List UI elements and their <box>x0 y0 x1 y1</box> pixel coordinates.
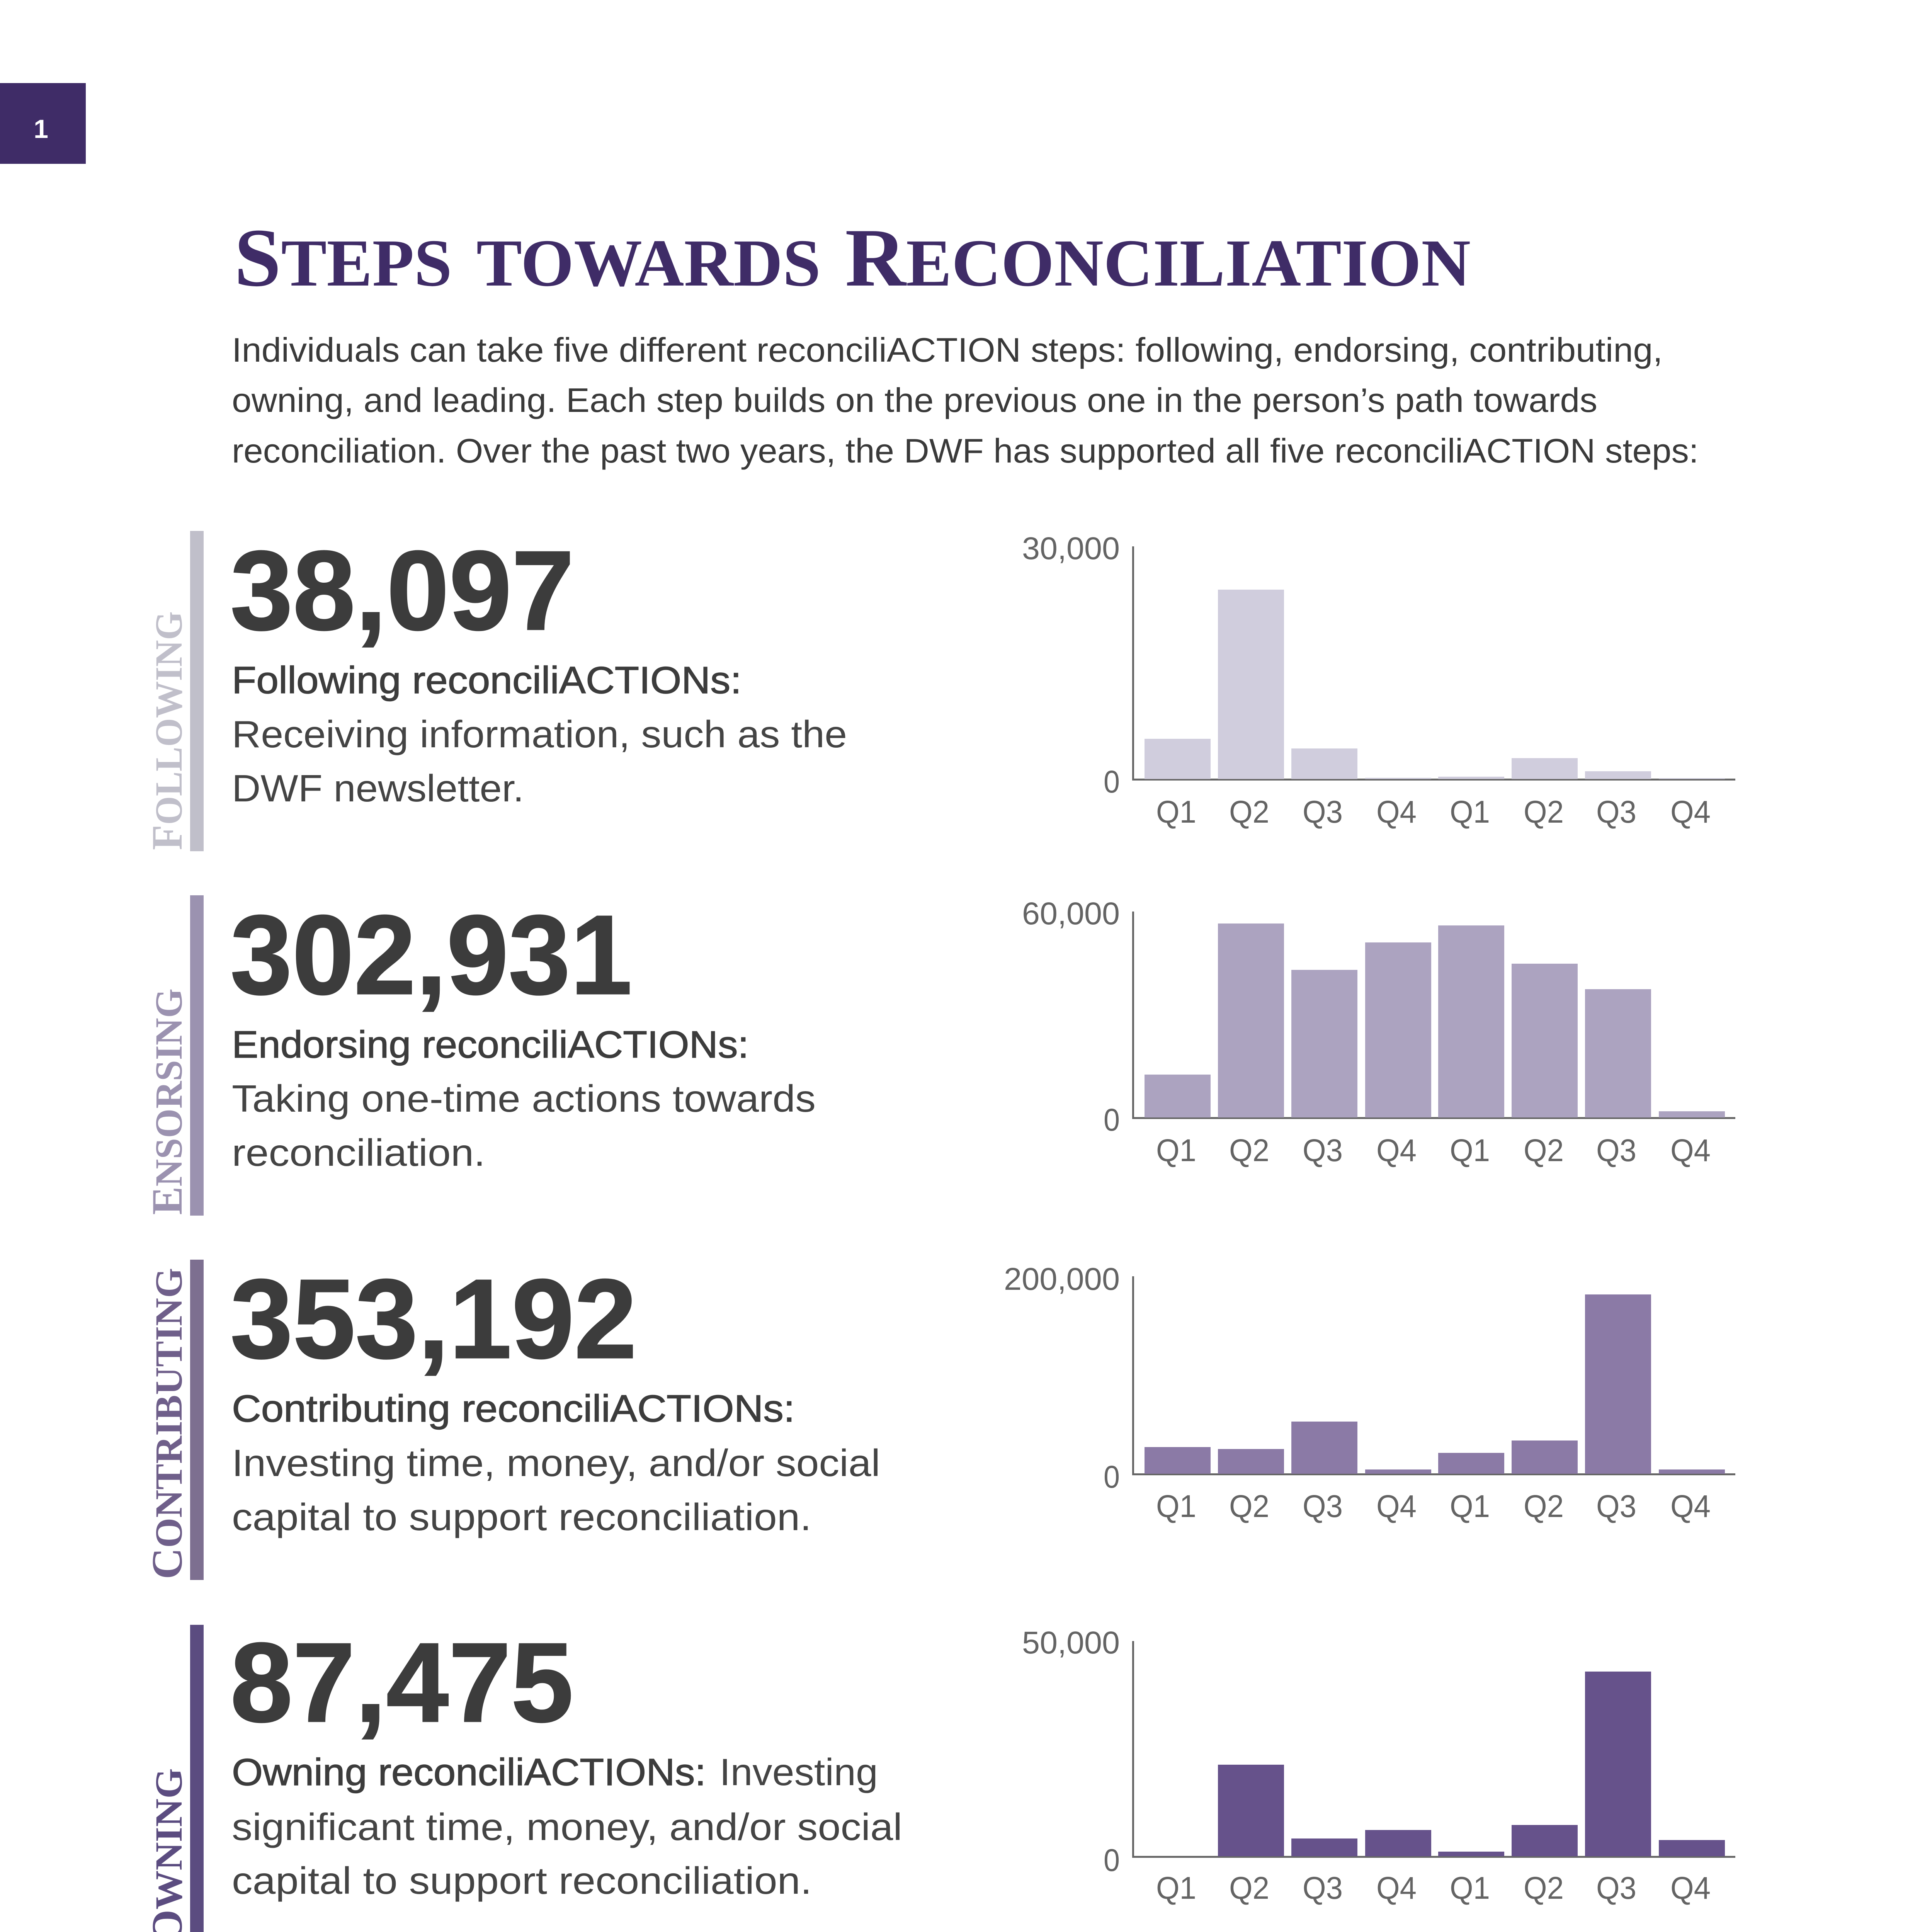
quarter labels: Q4 <box>1376 1871 1417 1906</box>
quarter labels: Q1 <box>1156 1489 1196 1524</box>
side label: following: Following <box>133 611 194 850</box>
quarter labels: Q3 <box>1596 1133 1636 1168</box>
quarter labels: Q3 <box>1596 1871 1636 1906</box>
description: following: Receiving information, such as the <box>232 713 847 755</box>
description: owning: Investing <box>719 1751 878 1793</box>
description: owning <box>232 1751 902 1902</box>
quarter labels: Q3 <box>1596 794 1636 830</box>
axis labels: 200,000 <box>1004 1262 1120 1297</box>
axis labels <box>1022 531 1120 799</box>
page number tab <box>0 83 86 164</box>
panel: contributing <box>133 1256 880 1580</box>
description: owning: significant time, money, and/or social <box>232 1806 902 1848</box>
side label: endorsing: Ensorsing <box>133 988 194 1215</box>
intro paragraph: reconciliation. Over the past two years, the DWF has supported all five reconciliACTION steps: <box>232 432 1699 470</box>
quarter labels: Q2 <box>1524 1489 1564 1524</box>
quarter labels: Q4 <box>1670 794 1711 830</box>
quarter labels: Q2 <box>1229 1871 1269 1906</box>
quarter labels: Q3 <box>1303 794 1343 830</box>
number: following: 38,097 <box>230 527 574 653</box>
side bar: endorsing <box>190 895 204 1216</box>
description: endorsing <box>232 1023 816 1174</box>
quarter labels <box>1156 1489 1711 1524</box>
quarter labels: Q1 <box>1450 1133 1490 1168</box>
quarter labels: Q4 <box>1670 1489 1711 1524</box>
description: owning: Owning reconciliACTIONs: <box>232 1751 706 1793</box>
axis labels: 0 <box>1104 1459 1120 1495</box>
quarter labels: Q2 <box>1229 1133 1269 1168</box>
panel: owning <box>133 1619 902 1932</box>
quarter labels: Q1 <box>1450 1489 1490 1524</box>
quarter labels: Q4 <box>1376 1133 1417 1168</box>
axis labels: 30,000 <box>1022 531 1120 566</box>
quarter labels: Q2 <box>1229 1489 1269 1524</box>
axis labels <box>1004 1262 1120 1495</box>
bar chart: contributing <box>1004 1262 1735 1524</box>
description: contributing: Contributing reconciliACTIONs: <box>232 1387 795 1430</box>
quarter labels: Q1 <box>1156 794 1196 830</box>
quarter labels: Q1 <box>1450 794 1490 830</box>
axis labels: 60,000 <box>1022 896 1120 931</box>
quarter labels: Q2 <box>1524 1133 1564 1168</box>
side bar: contributing <box>190 1260 204 1580</box>
bar chart: owning <box>1022 1625 1735 1906</box>
quarter labels: Q1 <box>1156 1871 1196 1906</box>
description: owning: capital to support reconciliation. <box>232 1859 812 1902</box>
quarter labels: Q2 <box>1524 1871 1564 1906</box>
description: contributing: capital to support reconciliation. <box>232 1496 811 1538</box>
bar chart: following <box>1022 531 1735 830</box>
axis labels: 50,000 <box>1022 1625 1120 1660</box>
number: contributing: 353,192 <box>230 1256 637 1382</box>
intro paragraph <box>232 331 1699 470</box>
axis labels: 0 <box>1104 764 1120 799</box>
bars <box>1218 1672 1725 1856</box>
description: following: DWF newsletter. <box>232 767 524 810</box>
quarter labels <box>1156 794 1711 830</box>
description: endorsing: reconciliation. <box>232 1131 485 1174</box>
quarter labels: Q4 <box>1670 1133 1711 1168</box>
number: endorsing: 302,931 <box>230 892 632 1018</box>
quarter labels: Q4 <box>1670 1871 1711 1906</box>
bars <box>1145 590 1725 779</box>
description: endorsing: Endorsing reconciliACTIONs: <box>232 1023 749 1066</box>
quarter labels: Q3 <box>1303 1133 1343 1168</box>
description: endorsing: Taking one-time actions towards <box>232 1077 816 1120</box>
axis labels: 0 <box>1104 1843 1120 1878</box>
axis labels <box>1022 896 1120 1138</box>
side bar: following <box>190 531 204 851</box>
description: following <box>232 659 847 810</box>
quarter labels: Q1 <box>1450 1871 1490 1906</box>
quarter labels: Q3 <box>1303 1489 1343 1524</box>
quarter labels: Q1 <box>1156 1133 1196 1168</box>
axis labels: 0 <box>1104 1102 1120 1138</box>
number: owning: 87,475 <box>230 1619 573 1745</box>
bar chart: endorsing <box>1022 896 1735 1168</box>
panel: following <box>133 527 847 851</box>
bars <box>1145 1294 1725 1474</box>
description: following: Following reconciliACTIONs: <box>232 659 742 701</box>
description: contributing: Investing time, money, and/or social <box>232 1442 880 1484</box>
quarter labels: Q2 <box>1524 794 1564 830</box>
quarter labels: Q2 <box>1229 794 1269 830</box>
quarter labels <box>1156 1871 1711 1906</box>
side bar: owning <box>190 1625 204 1932</box>
quarter labels: Q3 <box>1303 1871 1343 1906</box>
side label: contributing: Contributing <box>133 1268 194 1579</box>
bars <box>1145 923 1725 1117</box>
panel: endorsing <box>133 892 816 1216</box>
quarter labels: Q3 <box>1596 1489 1636 1524</box>
axis labels <box>1022 1625 1120 1878</box>
description: contributing <box>232 1387 880 1538</box>
page number tab: 1 <box>34 114 48 144</box>
quarter labels <box>1156 1133 1711 1168</box>
intro paragraph: Individuals can take five different reconciliACTION steps: following, endorsing, contributing, <box>232 331 1663 369</box>
title: Steps towards Reconciliation <box>234 200 1471 306</box>
quarter labels: Q4 <box>1376 794 1417 830</box>
intro paragraph: owning, and leading. Each step builds on the previous one in the person’s path towards <box>232 381 1597 419</box>
quarter labels: Q4 <box>1376 1489 1417 1524</box>
